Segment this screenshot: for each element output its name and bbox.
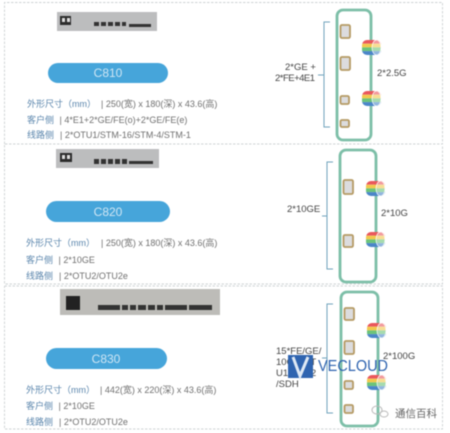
panel: C820 <box>4 145 442 284</box>
spec text: C820 <box>26 237 217 281</box>
device image: C810 <box>57 12 157 31</box>
spec text: C830: 线路侧 <box>26 416 53 427</box>
device image: C820 <box>56 149 159 168</box>
spec text: C830: | 2*OTU2/OTU2e <box>59 417 128 427</box>
spec text: C830: 外形尺寸（mm） <box>26 384 95 395</box>
spec text: C820: | 250(宽) x 180(深) x 43.6(高) <box>101 237 217 248</box>
device image: C830 <box>60 289 220 315</box>
watermark: VECLOUD logo: VECLOUD <box>318 358 388 375</box>
port diagram: C830: 10GE/OT <box>276 357 316 368</box>
spec text: C810: 外形尺寸（mm） <box>27 98 96 109</box>
model pill: C830: C830 <box>92 352 121 366</box>
spec text: C830: | 2*10GE <box>56 401 95 411</box>
watermark: VECLOUD logo <box>288 355 388 378</box>
model pill: C810: C810 <box>94 66 123 80</box>
port diagram: C830: 2*100G <box>383 351 415 362</box>
port diagram: C820: 2*10G <box>381 208 408 219</box>
spec text: C810 <box>27 98 217 140</box>
port diagram: C810: 2*GE + <box>285 62 316 73</box>
spec text: C810: | 250(宽) x 180(深) x 43.6(高) <box>101 98 217 109</box>
spec text: C810: | 4*E1+2*GE/FE(o)+2*GE/FE(e) <box>57 115 187 125</box>
port diagram: C810: 2*FE+4E1 <box>275 73 315 84</box>
model pill: C820: C820 <box>94 205 123 219</box>
spec text: C820: | 2*OTU2/OTU2e <box>59 271 128 281</box>
port diagram: C830: U1/OTU2 <box>276 368 316 379</box>
spec text: C810: 线路侧 <box>27 129 54 140</box>
panel: C810 <box>4 2 442 144</box>
spec text: C810: 客户侧 <box>27 114 54 125</box>
model pill: C830 <box>46 348 167 369</box>
port diagram: C830 <box>276 292 415 426</box>
spec text: C820: | 2*10GE <box>56 255 95 265</box>
spec text: C830: | 442(宽) x 220(深) x 43.6(高) <box>100 384 216 395</box>
spec text: C830: 客户侧 <box>26 400 53 411</box>
spec text: C810: | 2*OTU1/STM-16/STM-4/STM-1 <box>60 130 191 140</box>
spec text: C820: 客户侧 <box>26 254 53 265</box>
model pill: C810 <box>48 63 168 83</box>
spec text: C820: 线路侧 <box>26 270 53 281</box>
port diagram: C820 <box>287 150 408 282</box>
port diagram: C830: 15*FE/GE/ <box>276 346 322 357</box>
panel: C830 <box>4 286 442 429</box>
model pill: C820 <box>46 201 170 222</box>
spec text: C830 <box>26 384 216 427</box>
watermark: WeChat account: 通信百科 <box>395 407 437 420</box>
port diagram: C820: 2*10GE <box>287 204 320 215</box>
spec text: C820: 外形尺寸（mm） <box>26 237 95 248</box>
port diagram: C810: 2*2.5G <box>377 68 407 79</box>
watermark: WeChat account <box>372 406 437 420</box>
port diagram: C810 <box>275 10 407 140</box>
port diagram: C830: /SDH <box>276 379 299 390</box>
